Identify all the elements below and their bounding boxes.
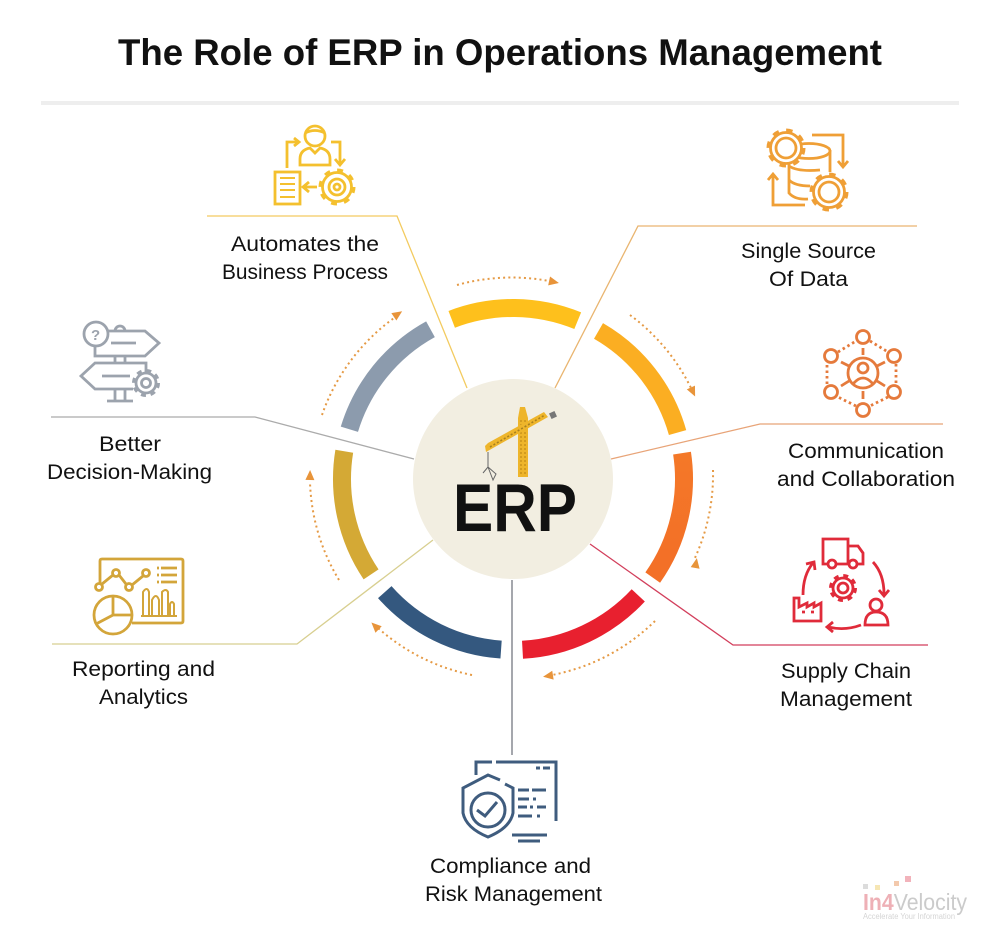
icon: decision-making: ?: [91, 327, 100, 344]
icon: compliance: [463, 762, 556, 841]
label: single source: Single Source: [741, 239, 876, 263]
label: reporting: Analytics: [99, 685, 188, 709]
logo: In4Velocity: [863, 889, 967, 915]
label: compliance: [425, 854, 602, 906]
connector lines: [51, 216, 943, 755]
icon: single source of data: [768, 130, 848, 210]
centre hub: ERP: [413, 379, 613, 579]
segmented ring: [271, 237, 755, 721]
icon: crane: [483, 407, 557, 480]
label: compliance: Risk Management: [425, 882, 602, 906]
label: decision-making: Decision-Making: [47, 460, 212, 484]
icon: reporting: [94, 559, 183, 634]
label: decision-making: Better: [99, 432, 161, 456]
dotted flow arrows: [305, 277, 713, 681]
label: decision-making: [47, 432, 212, 484]
label: compliance: Compliance and: [430, 854, 591, 878]
label: reporting: Reporting and: [72, 657, 215, 681]
logo: Accelerate Your Information: [863, 912, 955, 921]
title: The Role of ERP in Operations Management: [118, 32, 882, 73]
label: reporting: [72, 657, 215, 709]
label: automates: Automates the: [231, 232, 379, 256]
centre hub: ERP: ERP: [453, 470, 577, 546]
icon: decision-making: [81, 322, 159, 401]
label: supply chain: [780, 659, 912, 711]
label: communication: and Collaboration: [777, 467, 955, 491]
label: single source: Of Data: [769, 267, 848, 291]
label: automates: [222, 232, 388, 284]
label: communication: [777, 439, 955, 491]
label: communication: Communication: [788, 439, 944, 463]
label: single source: [741, 239, 876, 291]
icon: automates the business process: [275, 126, 354, 204]
label: supply chain: Supply Chain: [781, 659, 911, 683]
icon: communication: [824, 330, 900, 416]
icon: supply chain: [794, 539, 889, 632]
logo: [863, 876, 967, 921]
label: supply chain: Management: [780, 687, 912, 711]
label: automates: Business Process: [222, 260, 388, 284]
